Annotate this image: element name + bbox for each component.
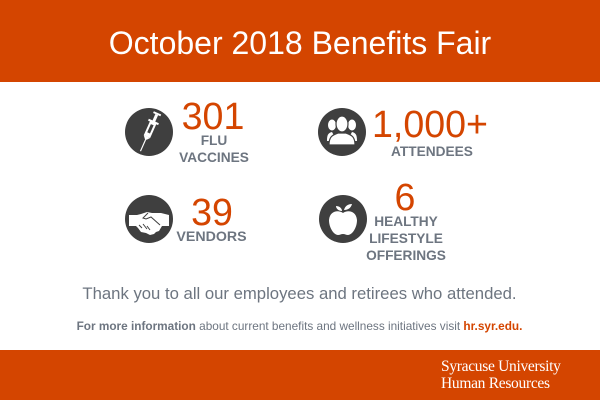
icon: attendees xyxy=(318,108,366,156)
stat: healthy offerings label: HEALTHY xyxy=(374,214,438,229)
stat: vendors number: 39 xyxy=(191,191,233,233)
stat: attendees label: ATTENDEES xyxy=(391,144,473,159)
stat: flu vaccines label: VACCINES xyxy=(179,150,249,165)
stat: healthy offerings label: LIFESTYLE xyxy=(369,231,443,246)
stat: healthy offerings label: OFFERINGS xyxy=(366,248,446,263)
footer wordmark: Syracuse University xyxy=(441,358,561,375)
footer band xyxy=(0,350,600,400)
footer wordmark: Human Resources xyxy=(441,375,550,392)
header band xyxy=(0,0,600,82)
stat: vendors label: VENDORS xyxy=(176,229,247,245)
icon: apple xyxy=(319,195,367,243)
stat: healthy offerings label xyxy=(366,214,446,263)
stat: healthy offerings number: 6 xyxy=(395,176,415,218)
more information text: For more information about current benefits and wellness initiatives visit hr.syr.edu. xyxy=(77,319,522,333)
title: October 2018 Benefits Fair xyxy=(109,25,491,61)
stat: flu vaccines label xyxy=(179,133,249,165)
thank you text: Thank you to all our employees and retirees who attended. xyxy=(82,284,517,303)
icon: syringe xyxy=(125,108,173,156)
icon: handshake xyxy=(125,195,173,243)
stat: flu vaccines number: 301 xyxy=(182,95,244,137)
footer wordmark xyxy=(441,358,561,392)
stat: flu vaccines label: FLU xyxy=(201,133,227,148)
stat: attendees number: 1,000+ xyxy=(372,103,488,145)
